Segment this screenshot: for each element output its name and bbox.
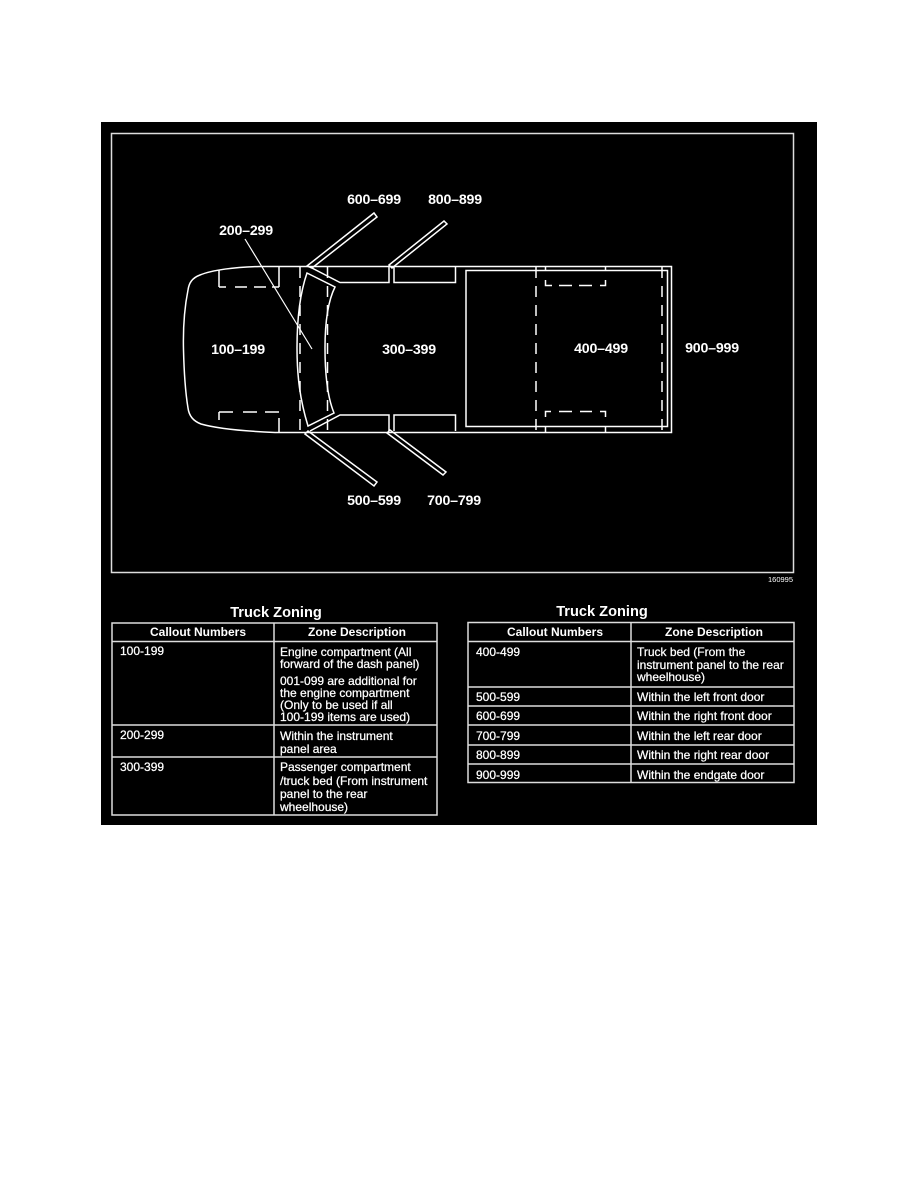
row 100-199: 100-199 (120, 644, 164, 658)
row 300-399: /truck bed (From instrument (280, 774, 428, 788)
truck bed (466, 270, 668, 426)
callout labels: 900–999 (685, 340, 739, 356)
row 100-199 (120, 644, 419, 724)
row 600-699: Within the right front door (637, 709, 772, 723)
left table header (150, 625, 406, 639)
cab doors bottom (310, 415, 456, 431)
row 100-199: 001-099 are additional for (280, 674, 417, 688)
callout labels: 600–699 (347, 192, 401, 208)
row 100-199: 100-199 items are used) (280, 710, 410, 724)
right table header (507, 625, 763, 639)
callout labels (211, 192, 739, 509)
cab doors top (310, 267, 456, 282)
callout labels: 300–399 (382, 342, 436, 358)
row 700-799: Within the left rear door (637, 729, 762, 743)
row 500-599 (476, 690, 764, 704)
figure number: 160995 (768, 575, 793, 584)
row 500-599: Within the left front door (637, 690, 764, 704)
row 200-299: 200-299 (120, 728, 164, 742)
left table title: Truck Zoning (230, 605, 322, 621)
row 900-999: 900-999 (476, 768, 520, 782)
truck diagram (183, 192, 739, 509)
callout labels: 200–299 (219, 223, 273, 239)
row 400-499: 400-499 (476, 645, 520, 659)
right table header: Callout Numbers (507, 625, 603, 639)
left table (112, 623, 437, 815)
right table title: Truck Zoning (556, 604, 648, 620)
row 100-199: Engine compartment (All (280, 645, 411, 659)
door callout arrows (245, 213, 447, 486)
truck body outline (183, 266, 443, 432)
row 900-999 (476, 768, 764, 782)
row 400-499: Truck bed (From the (637, 645, 746, 659)
row 200-299: Within the instrument (280, 729, 393, 743)
left table header: Callout Numbers (150, 625, 246, 639)
left table header: Zone Description (308, 625, 406, 639)
row 700-799 (476, 729, 762, 743)
row 300-399: Passenger compartment (280, 760, 411, 774)
callout labels: 700–799 (427, 493, 481, 509)
row 100-199: forward of the dash panel) (280, 657, 419, 671)
black panel (101, 122, 817, 825)
row 900-999: Within the endgate door (637, 768, 764, 782)
callout labels: 100–199 (211, 342, 265, 358)
callout labels: 500–599 (347, 493, 401, 509)
row 300-399 (120, 760, 428, 814)
instrument panel (297, 273, 335, 426)
right table (468, 622, 794, 782)
callout labels: 800–899 (428, 192, 482, 208)
row 700-799: 700-799 (476, 729, 520, 743)
diagram frame (112, 134, 794, 572)
row 600-699 (476, 709, 772, 723)
row 300-399: wheelhouse) (279, 800, 348, 814)
row 300-399: panel to the rear (280, 787, 367, 801)
callout labels: 400–499 (574, 341, 628, 357)
row 200-299 (120, 728, 393, 756)
right table header: Zone Description (665, 625, 763, 639)
row 400-499 (476, 645, 784, 684)
row 200-299: panel area (280, 742, 337, 756)
row 300-399: 300-399 (120, 760, 164, 774)
row 600-699: 600-699 (476, 709, 520, 723)
row 100-199: the engine compartment (280, 686, 410, 700)
dashed zone lines (219, 266, 662, 432)
row 400-499: instrument panel to the rear (637, 658, 784, 672)
row 800-899 (476, 748, 769, 762)
row 800-899: 800-899 (476, 748, 520, 762)
row 400-499: wheelhouse) (636, 670, 705, 684)
row 100-199: (Only to be used if all (280, 698, 393, 712)
row 500-599: 500-599 (476, 690, 520, 704)
row 800-899: Within the right rear door (637, 748, 769, 762)
